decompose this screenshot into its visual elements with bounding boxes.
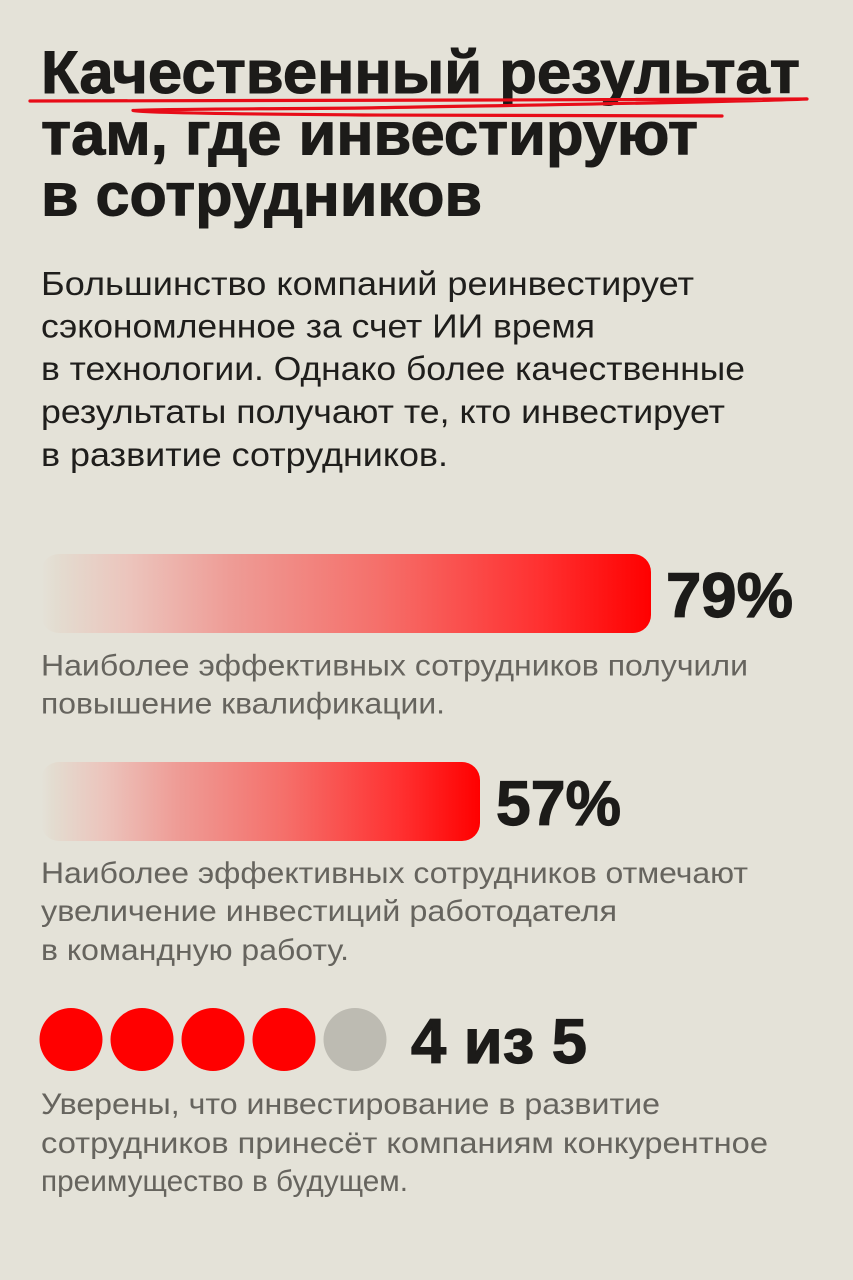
caption: 4 из 5: сотрудников принесёт компаниям конкурентное [41,1127,768,1160]
dots: four of five [40,1008,386,1071]
value: 79%: 79% [666,561,793,631]
title: там, где инвестируют [41,100,698,168]
title: Качественный результат [41,39,800,106]
intro paragraph: Большинство компаний реинвестирует [41,265,694,302]
intro paragraph: результаты получают те, кто инвестирует [41,393,725,430]
bar: 79% [41,554,651,633]
intro paragraph [41,265,745,473]
bar: 57% [41,762,480,841]
intro paragraph: в развитие сотрудников. [41,436,448,473]
stat: 57% [41,762,748,967]
caption: 57%: Наиболее эффективных сотрудников отмечают [41,857,748,890]
caption: 79% [41,650,748,720]
intro paragraph: сэкономленное за счет ИИ время [41,308,595,344]
caption: 57%: в командную работу. [41,934,349,967]
caption: 57% [41,857,748,967]
stat: 4 из 5 [40,1007,768,1198]
stat: 79% [41,554,793,720]
value: 57%: 57% [496,769,621,839]
caption: 79%: повышение квалификации. [41,688,445,720]
intro paragraph: в технологии. Однако более качественные [41,350,745,387]
caption: 4 из 5: Уверены, что инвестирование в развитие [41,1088,660,1121]
caption: 4 из 5: преимущество в будущем. [41,1165,408,1198]
value: 4 из 5: 4 из 5 [411,1007,587,1077]
red hand-drawn underline [30,99,807,116]
caption: 4 из 5 [41,1088,768,1198]
caption: 79%: Наиболее эффективных сотрудников получили [41,650,748,682]
caption: 57%: увеличение инвестиций работодателя [41,895,617,928]
title: в сотрудников [41,162,482,228]
title [41,39,800,228]
